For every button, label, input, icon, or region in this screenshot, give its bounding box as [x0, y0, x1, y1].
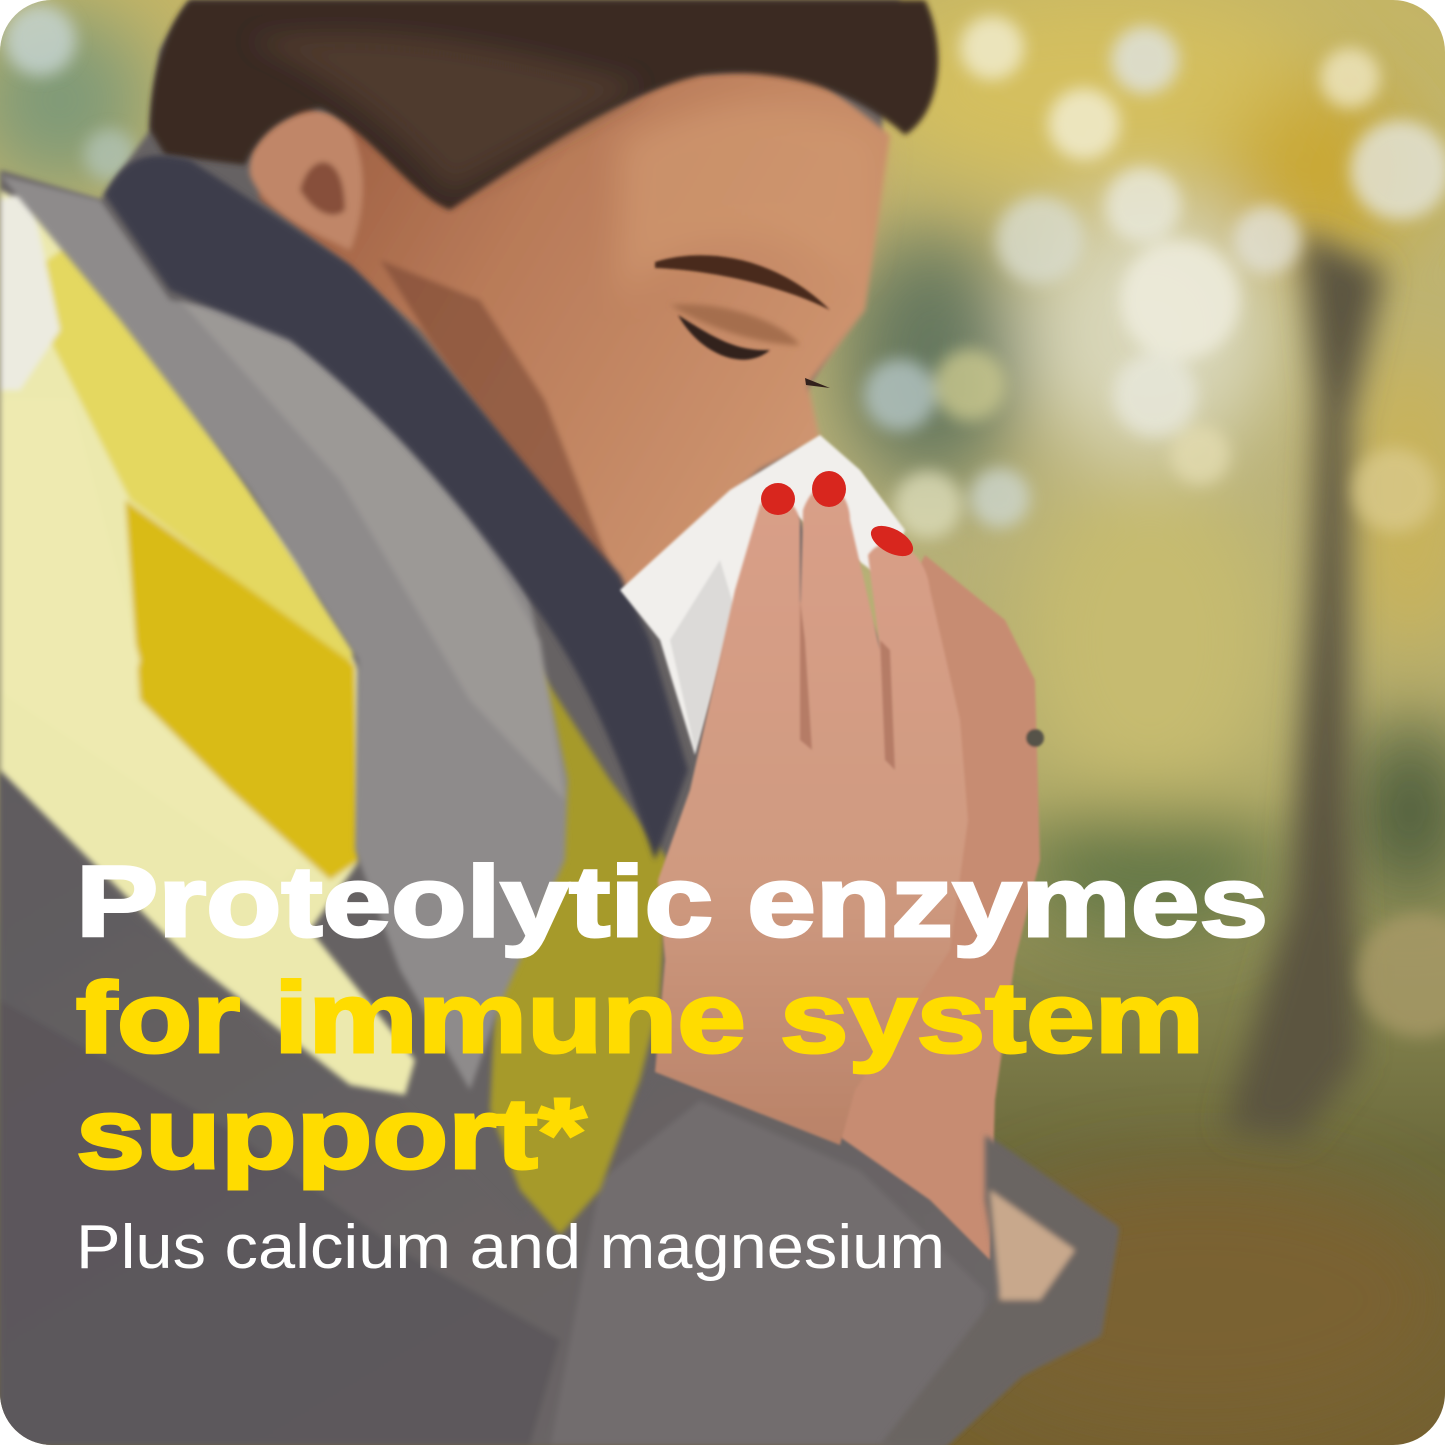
yellow and cream blanket scarf	[0, 190, 415, 1095]
dark navy scarf	[105, 156, 688, 860]
grey knit scarf fold	[0, 175, 568, 1090]
red nails	[761, 471, 918, 562]
tree trunk	[1225, 230, 1385, 1140]
tissue	[620, 435, 905, 755]
hair	[150, 0, 938, 210]
headline line 3: support*	[76, 1078, 586, 1190]
neck and face	[250, 65, 890, 600]
headline line 2: for immune system	[76, 962, 1204, 1074]
back hand	[830, 555, 1044, 1260]
woman silhouette base	[0, 0, 1110, 1445]
headline line 1: Proteolytic enzymes	[76, 846, 1268, 958]
subheading: Plus calcium and magnesium	[76, 1213, 945, 1282]
headline	[76, 846, 1268, 1190]
mustard scarf fold	[490, 640, 668, 1235]
coat sleeve cuff	[880, 1135, 1118, 1445]
coat body	[0, 770, 1118, 1445]
front hand and fingers	[655, 485, 968, 1145]
eye and eyebrow	[655, 255, 830, 388]
